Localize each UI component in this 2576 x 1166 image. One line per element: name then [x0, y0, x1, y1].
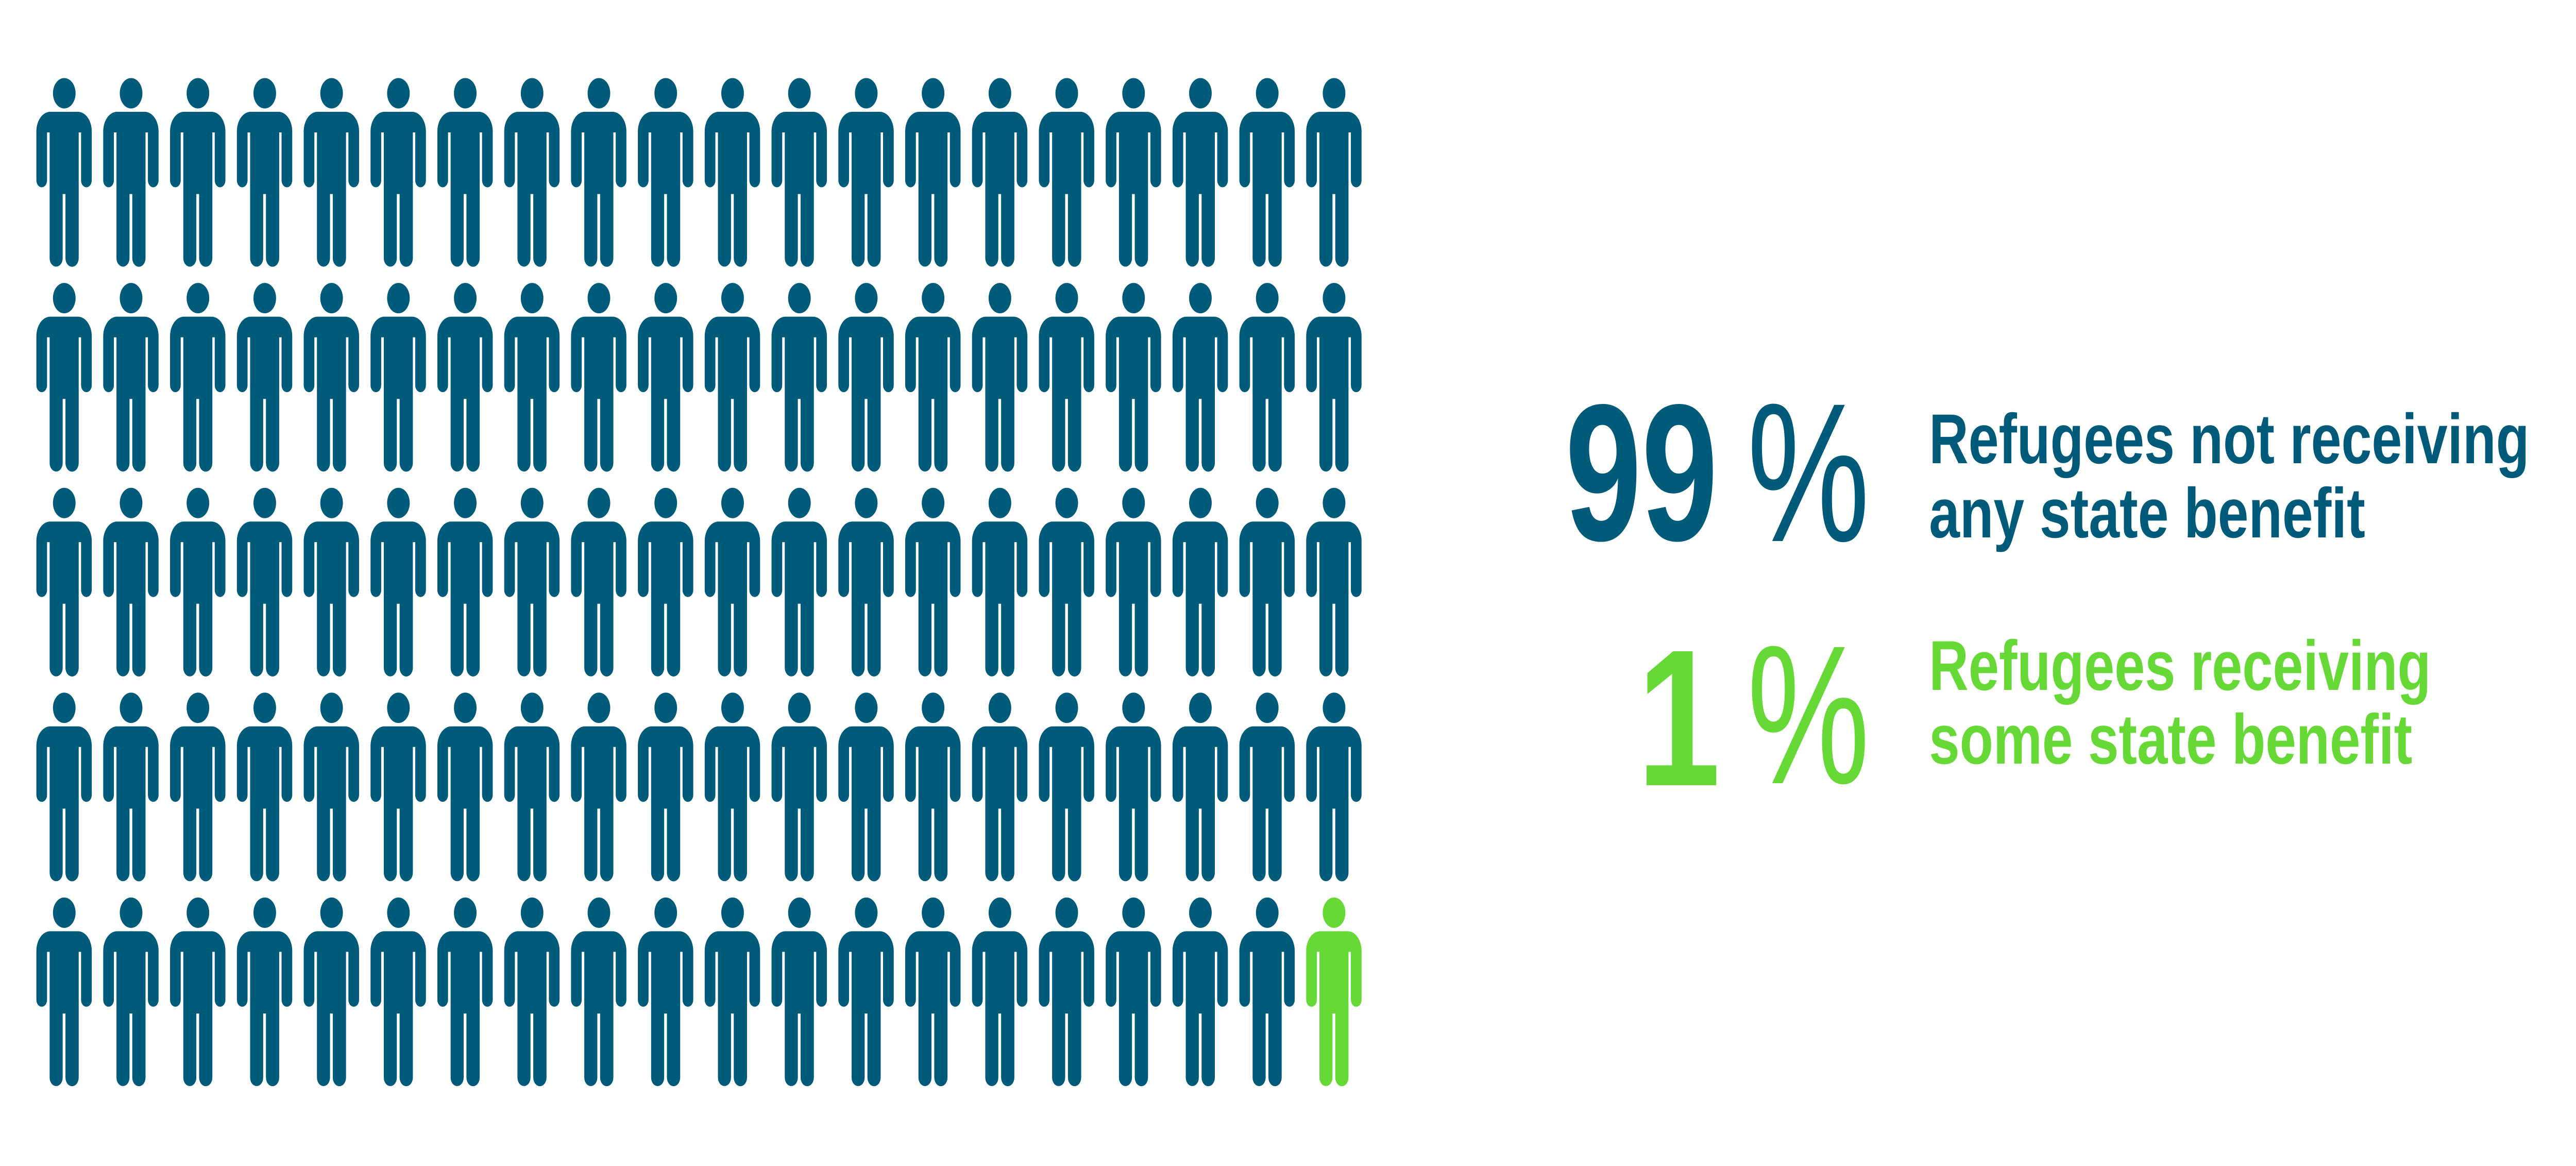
row 4: [37, 692, 1362, 882]
big number 99: 99: [1565, 364, 1718, 582]
row 1: [37, 78, 1362, 267]
stat: 99% not receiving: [1565, 362, 2529, 583]
row 2: [37, 283, 1362, 471]
percent sign: %: [1747, 362, 1870, 583]
stat: 1% receiving: some state benefit: [1929, 699, 2412, 779]
pictogram grid: 100 people: [37, 78, 1362, 1086]
label: Refugees receiving: [1929, 626, 2431, 705]
row 5: [37, 898, 1362, 1086]
row 3: [37, 488, 1362, 677]
stat: 99% not receiving: any state benefit: [1929, 473, 2365, 552]
icon: green person (1%): [1306, 898, 1362, 1086]
percent sign: %: [1747, 604, 1870, 825]
stat: 1% receiving: [1637, 604, 2431, 827]
label: Refugees not receiving: [1929, 399, 2529, 478]
big number 1: 1: [1637, 610, 1720, 827]
